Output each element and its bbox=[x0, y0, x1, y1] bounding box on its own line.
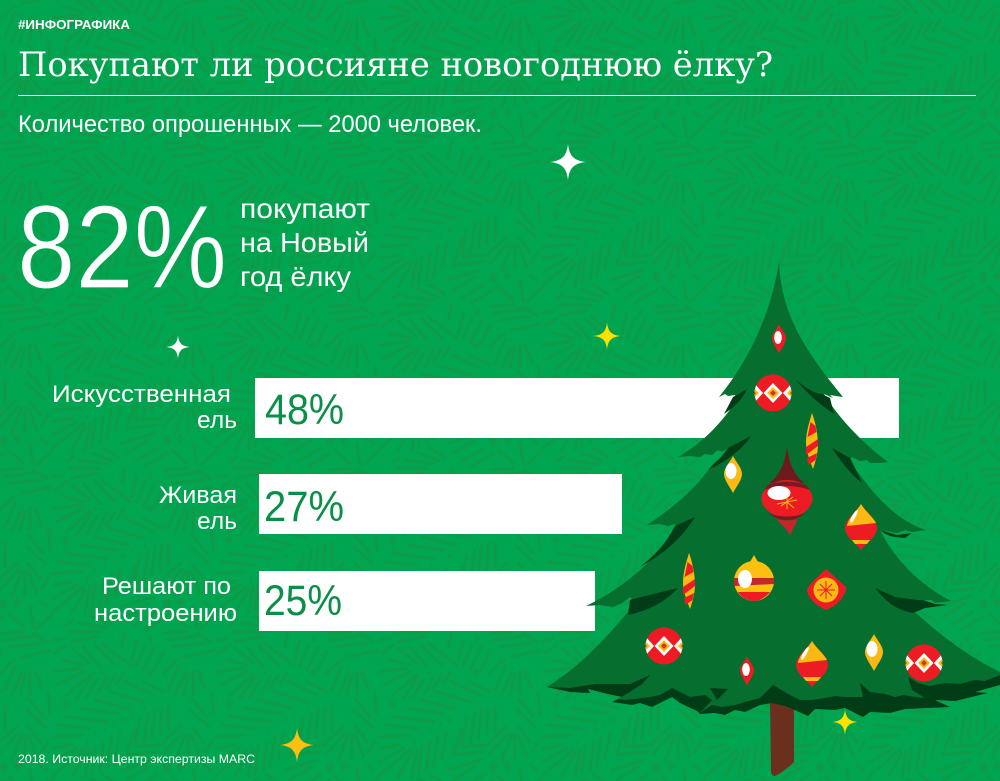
bar: artificial fir 48%: 48% bbox=[265, 386, 344, 434]
ornament: bicolor diamond right bbox=[845, 504, 877, 550]
ornament: bicolor diamond bottom bbox=[796, 641, 828, 687]
label: artificial fir: Искусственная bbox=[52, 381, 231, 408]
tree lower shadow silhouette bbox=[547, 640, 1000, 717]
label: live fir: Живая bbox=[159, 482, 237, 509]
sparkle: yellow bottom left bbox=[280, 728, 314, 762]
ornament: patterned ball right bbox=[896, 643, 952, 682]
tree trunk bbox=[770, 700, 794, 776]
bar chart bbox=[52, 378, 899, 631]
ornament: patterned ball top bbox=[745, 373, 801, 412]
title: Покупают ли россияне новогоднюю ёлку? bbox=[18, 45, 773, 85]
sparkle: white large bbox=[550, 144, 586, 180]
label: live fir: ель bbox=[197, 508, 237, 535]
statistic caption: год ёлку bbox=[240, 261, 351, 292]
label: artificial fir bbox=[52, 381, 237, 434]
ornament: red diamond with snowflake bbox=[807, 569, 846, 610]
bar: depends on mood 25%: 25% bbox=[264, 577, 342, 625]
big statistic: 82%: 82% bbox=[17, 181, 227, 314]
label: depends on mood: Решают по bbox=[102, 573, 231, 600]
sparkle: white small bbox=[166, 336, 190, 358]
tree crown bbox=[547, 262, 1000, 713]
statistic caption: покупают bbox=[240, 193, 370, 224]
bar: live fir 27% bbox=[259, 474, 622, 534]
sparkle: yellow top bbox=[594, 322, 620, 350]
tag: #ИНФОГРАФИКА: #ИНФОГРАФИКА bbox=[18, 17, 131, 32]
ornament: small red drop bbox=[740, 656, 754, 686]
bar: depends on mood 25% bbox=[259, 571, 595, 631]
ornament: yellow ball bbox=[734, 555, 774, 601]
header divider bbox=[18, 95, 976, 96]
source footer: 2018. Источник: Центр экспертизы MARC bbox=[18, 752, 255, 766]
christmas tree bbox=[547, 262, 1000, 776]
label: depends on mood bbox=[94, 573, 237, 627]
label: depends on mood: настроению bbox=[94, 600, 237, 627]
ornament: striped long top bbox=[806, 413, 818, 469]
sparkle: yellow near trunk bbox=[832, 710, 858, 734]
label: artificial fir: ель bbox=[197, 407, 237, 434]
subtitle: Количество опрошенных — 2000 человек. bbox=[18, 111, 482, 138]
ornament: patterned ball left bbox=[636, 626, 692, 664]
statistic caption: на Новый bbox=[240, 227, 369, 258]
ornament: yellow drop left bbox=[724, 456, 742, 493]
tree branch shadows bbox=[628, 380, 947, 700]
bar: live fir 27%: 27% bbox=[264, 483, 344, 531]
label: live fir bbox=[159, 482, 237, 535]
ornament: yellow drop right bbox=[865, 634, 883, 671]
ornament: striped long left bbox=[683, 553, 695, 609]
statistic caption bbox=[240, 193, 370, 292]
bar: artificial fir 48% bbox=[255, 378, 899, 438]
ornament: top red drop bbox=[772, 324, 786, 354]
ornament: large red spire bauble bbox=[761, 446, 813, 535]
